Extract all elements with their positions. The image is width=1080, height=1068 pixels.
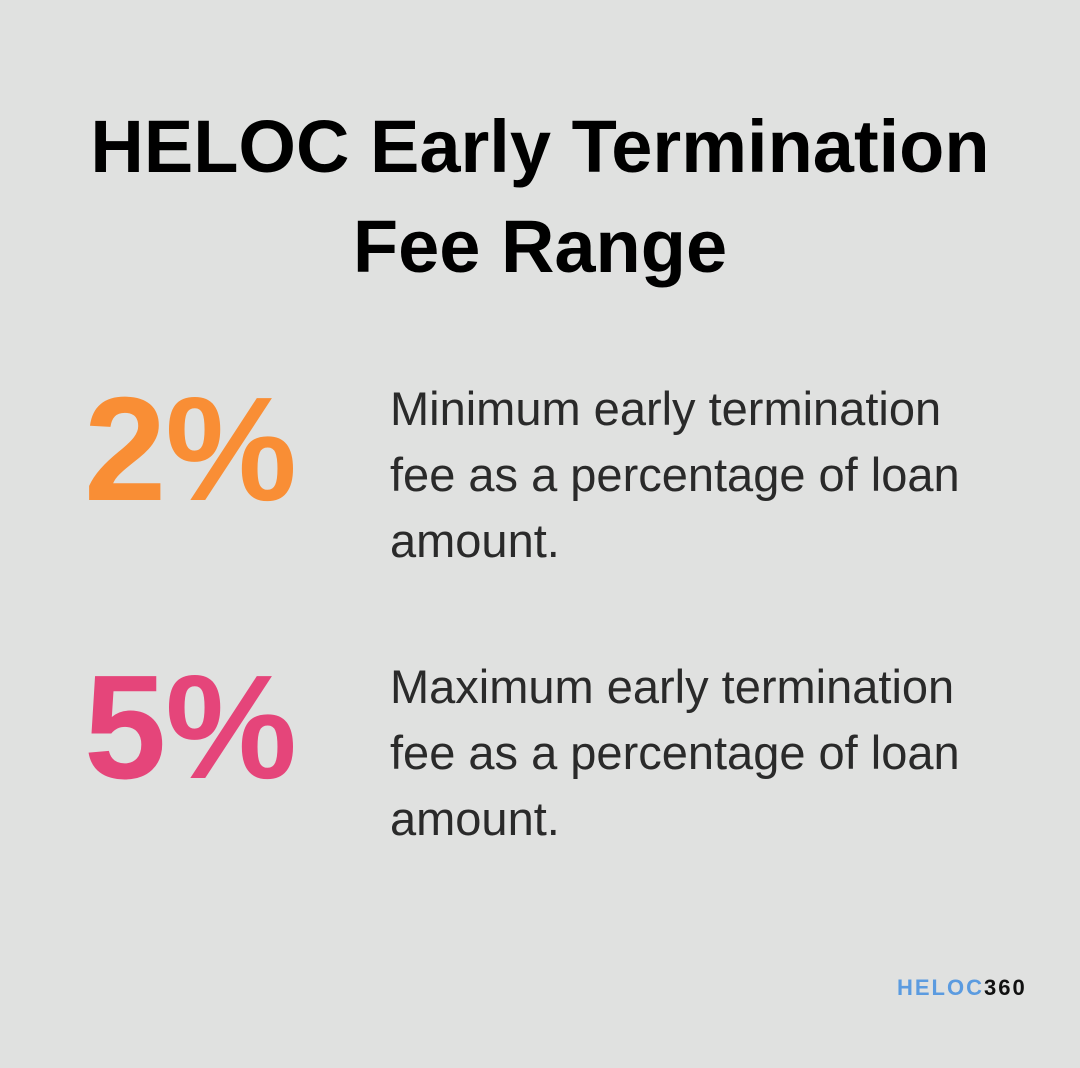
logo: HELOC360 bbox=[897, 975, 1027, 1000]
title bbox=[90, 105, 990, 288]
stat: 5%: 5% bbox=[84, 645, 296, 810]
title: HELOC Early Termination bbox=[90, 105, 990, 188]
text: minimum bbox=[390, 382, 960, 567]
text: maximum: fee as a percentage of loan bbox=[390, 726, 960, 779]
stat: 2%: 2% bbox=[84, 367, 296, 532]
text: maximum: Maximum early termination bbox=[390, 660, 954, 713]
title: Fee Range bbox=[353, 205, 727, 288]
text: minimum: amount. bbox=[390, 514, 560, 567]
text: minimum: fee as a percentage of loan bbox=[390, 448, 960, 501]
text: maximum: amount. bbox=[390, 792, 560, 845]
text: minimum: Minimum early termination bbox=[390, 382, 941, 435]
text: maximum bbox=[390, 660, 960, 845]
